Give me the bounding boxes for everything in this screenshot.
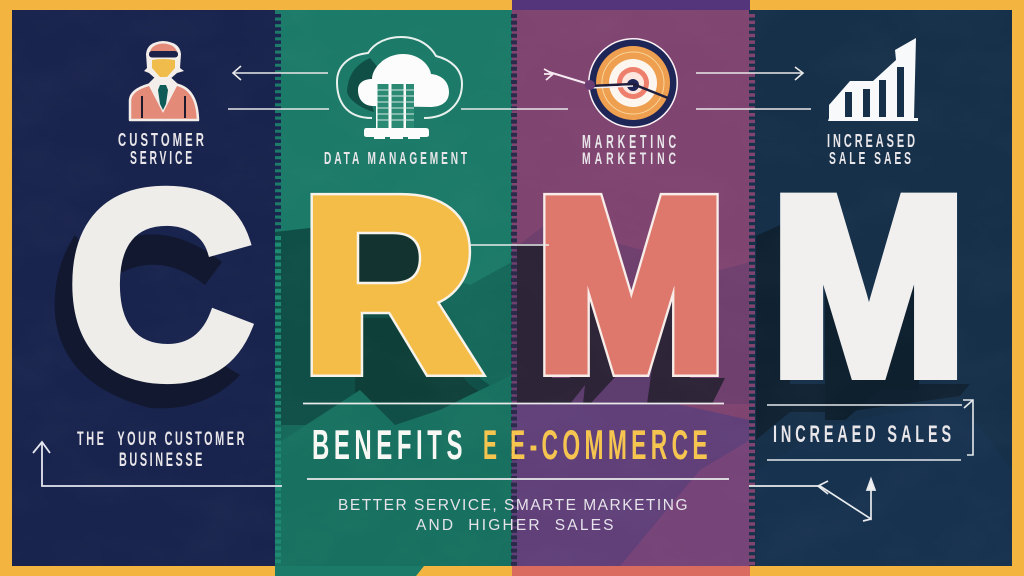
label: customer service bbox=[118, 129, 207, 168]
label: increased sales: SALE SAES bbox=[829, 148, 914, 168]
line: service to cloud bbox=[228, 108, 329, 110]
letter C: C bbox=[66, 136, 255, 433]
letter R counter bbox=[358, 233, 420, 283]
subtitle: BETTER SERVICE, SMARTE MARKETING bbox=[338, 497, 690, 514]
letter C shadow bbox=[55, 235, 240, 408]
text block: the your customer: BUSINESSE bbox=[119, 450, 205, 471]
line: target to chart bbox=[696, 108, 811, 110]
panel: navy left column bbox=[12, 10, 276, 566]
letter M salmon: M bbox=[537, 151, 725, 419]
subtitle: AND HIGHER SALES bbox=[416, 517, 616, 534]
label: increased sales: INCREASED bbox=[827, 130, 918, 151]
letter R: R bbox=[304, 151, 475, 419]
title rule bottom bbox=[307, 478, 729, 480]
title bbox=[312, 421, 712, 468]
icon: customer service agent bbox=[130, 41, 198, 120]
perforated column edges bbox=[278, 14, 752, 566]
panel: purple column bbox=[512, 10, 750, 566]
label: customer service: SERVICE bbox=[130, 147, 195, 168]
letter M salmon: M bbox=[537, 151, 725, 419]
label: customer service: CUSTOMER bbox=[118, 129, 207, 150]
connector line between R and M bbox=[470, 244, 549, 246]
line: cloud to target bbox=[461, 108, 568, 110]
arrow: left from cloud bbox=[233, 66, 328, 80]
arrow: left bottom up bbox=[33, 442, 282, 486]
title: E-COMMERCE bbox=[510, 421, 712, 468]
letter R: R bbox=[304, 151, 475, 419]
panel: dark blue right column bbox=[749, 10, 1012, 566]
arrow: right to chart bbox=[696, 67, 803, 80]
text block: the your customer: THE YOUR CUSTOMER bbox=[77, 429, 247, 450]
label: marketing: MARKETINC bbox=[582, 149, 680, 168]
label: data management: DATA MANAGEMENT bbox=[324, 148, 470, 168]
callout: increased sales box bbox=[767, 400, 973, 460]
icon: marketing target bbox=[544, 38, 678, 128]
title rule top bbox=[303, 402, 724, 404]
label: marketing bbox=[582, 132, 680, 168]
title: E bbox=[483, 421, 497, 468]
text block: the your customer bbox=[77, 429, 247, 471]
icon: rising sales chart bbox=[828, 38, 918, 121]
letter M white: M bbox=[771, 145, 966, 427]
arrow: right bottom zigzag bbox=[749, 479, 875, 521]
panel: green column bbox=[275, 10, 512, 566]
icon: cloud data management bbox=[337, 37, 462, 139]
title: BENEFITS bbox=[312, 421, 467, 468]
label: increased sales bbox=[827, 130, 918, 168]
subtitle bbox=[338, 497, 690, 534]
label: marketing: MARKETINC bbox=[582, 132, 680, 152]
